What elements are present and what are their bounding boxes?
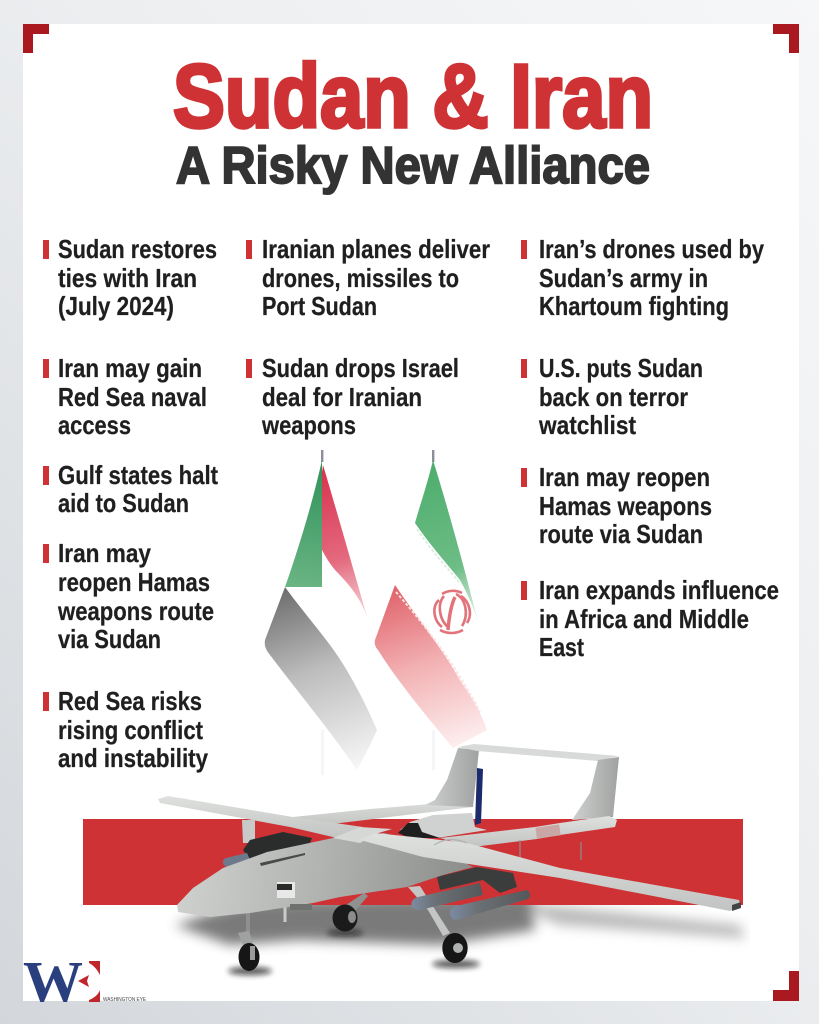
bullet: Iran may reopen route	[521, 462, 712, 549]
corner bracket: top left	[23, 24, 49, 53]
title	[173, 47, 653, 195]
fuselage	[177, 833, 473, 917]
pylons	[437, 867, 517, 893]
bullet: U.S. terror watchlist: back on terror	[539, 382, 688, 412]
bullet: Iranian planes deliver: drones, missiles to	[262, 263, 459, 293]
bullet: Sudan drops Israel deal: Sudan drops Israel	[262, 353, 459, 383]
bullet: Gulf states halt aid	[43, 460, 218, 518]
vertical tail right	[572, 757, 619, 820]
bullet: Hamas weapons route: weapons route	[57, 596, 214, 626]
flag: Sudan	[265, 450, 377, 775]
antennas	[520, 840, 581, 860]
bullet: Iran expands influence	[521, 575, 779, 662]
bullet: Hamas weapons route: reopen Hamas	[58, 567, 210, 597]
icon: Iranian emblem	[434, 591, 470, 633]
bullet: Gulf states halt aid: Gulf states halt	[58, 460, 218, 490]
rear left boom	[293, 798, 473, 826]
bullet: Iran may reopen route: Iran may reopen	[539, 462, 710, 492]
missile two	[450, 890, 530, 920]
corner bracket: top right	[773, 24, 799, 53]
logo: Washington Eye: WASHINGTON EYE	[103, 997, 147, 1003]
right wing	[360, 833, 741, 911]
bullet: U.S. terror watchlist	[521, 353, 703, 440]
bullet: U.S. terror watchlist: U.S. puts Sudan	[539, 353, 703, 383]
bullet: Hamas weapons route: via Sudan	[58, 624, 161, 654]
bullet: Red Sea naval access: access	[58, 410, 131, 440]
bullet: Red Sea risks	[43, 686, 208, 773]
bullet: Red Sea naval access: Red Sea naval	[58, 382, 207, 412]
bullet: Iran's drones in Khartoum	[521, 234, 764, 321]
corner bracket: bottom right	[773, 971, 799, 1001]
bullet: Hamas weapons route	[43, 538, 214, 654]
wing root	[333, 827, 392, 843]
bullet: Iran's drones in Khartoum: Khartoum fighting	[539, 291, 729, 321]
logo: Washington Eye	[23, 949, 147, 1014]
bullet: Hamas weapons route: Iran may	[58, 538, 151, 568]
bullet: Iran expands influence: East	[539, 632, 584, 662]
subtitle: A Risky New Alliance	[176, 137, 650, 195]
bullet: Sudan restores ties: (July 2024)	[58, 291, 174, 321]
bullet: Sudan drops Israel deal: deal for Iranian	[262, 382, 422, 412]
vertical tail left	[425, 748, 479, 807]
left wing	[158, 796, 363, 838]
red band	[83, 819, 743, 905]
upper fuselage cover	[400, 813, 487, 838]
landing gear	[238, 886, 468, 971]
bullet: Iranian planes deliver: Iranian planes deliver	[262, 234, 490, 264]
bullet: Red Sea naval access	[43, 353, 207, 440]
logo: Washington Eye: W	[23, 949, 83, 1014]
title: Sudan & Iran	[173, 47, 653, 147]
bullet: Iran's drones in Khartoum: Sudan’s army in	[539, 263, 708, 293]
bullet: Iranian planes deliver: Port Sudan	[262, 291, 377, 321]
bullet: Iran expands influence: Iran expands influence	[539, 575, 779, 605]
bullet: Iran may reopen route: Hamas weapons	[539, 491, 712, 521]
bullet: Red Sea naval access: Iran may gain	[58, 353, 202, 383]
right boom	[440, 816, 617, 847]
bullet: Red Sea risks: rising conflict	[58, 715, 203, 745]
sensor pod	[223, 853, 250, 867]
bullet: Iran expands influence: in Africa and Middle	[539, 604, 749, 634]
bullet: Gulf states halt aid: aid to Sudan	[58, 488, 189, 518]
bullet: Iran may reopen route: route via Sudan	[539, 519, 703, 549]
bullet: U.S. terror watchlist: watchlist	[538, 410, 636, 440]
bullet: Iranian planes deliver	[246, 234, 490, 321]
front sensor strut	[242, 820, 255, 843]
bullet: Iran's drones in Khartoum: Iran’s drones used by	[539, 234, 764, 264]
horizontal stabilizer	[458, 744, 619, 761]
bullet: Sudan restores ties: ties with Iran	[58, 263, 197, 293]
bullet: Red Sea risks: and instability	[58, 743, 208, 773]
drone shadows	[175, 895, 745, 945]
bullet: Sudan drops Israel deal	[246, 353, 459, 440]
bullet: Sudan restores ties	[43, 234, 217, 321]
drone image	[158, 744, 745, 975]
sensor gimbal	[243, 832, 312, 860]
bullet: Sudan drops Israel deal: weapons	[261, 410, 356, 440]
flag: Iran	[375, 450, 487, 770]
bullet: Red Sea risks: Red Sea risks	[58, 686, 202, 716]
bullet: Sudan restores ties: Sudan restores	[58, 234, 217, 264]
missile one	[411, 883, 483, 910]
blue rudder	[475, 768, 483, 825]
